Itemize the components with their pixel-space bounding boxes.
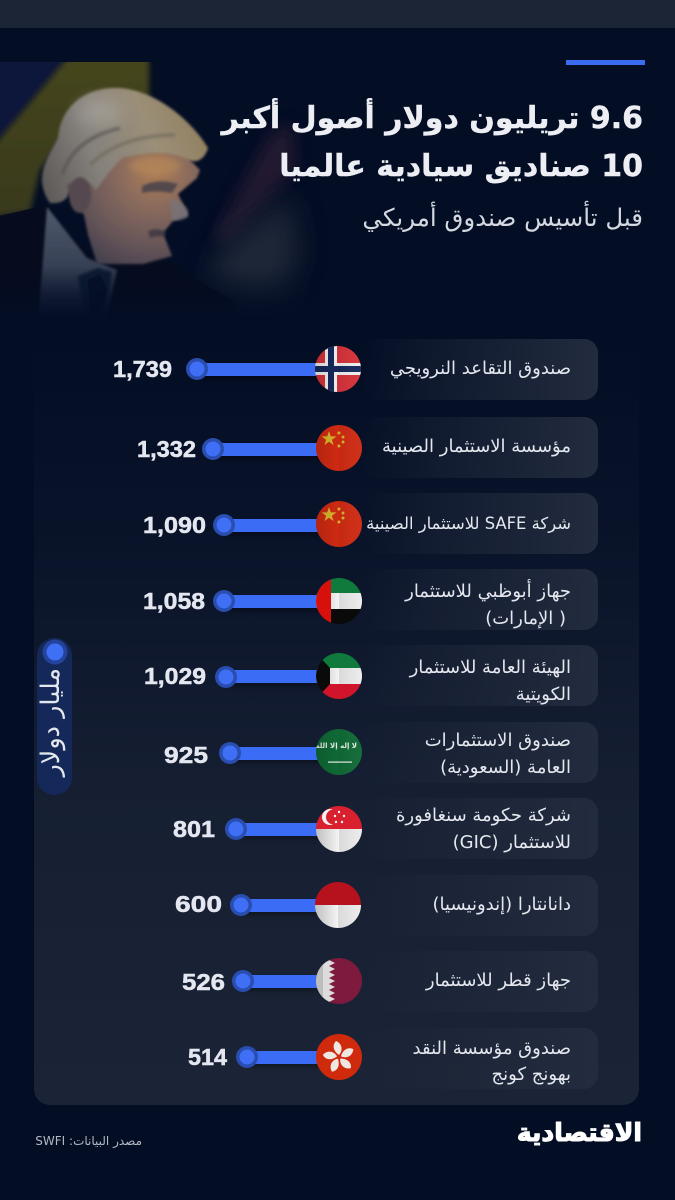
row 10: Hong Kong: 514 (188, 1044, 227, 1070)
source note: مصدر البيانات: SWFI (35, 1134, 142, 1149)
accent bar (566, 60, 645, 65)
row 7: Singapore (173, 798, 598, 859)
row 10: Hong Kong: بهونج كونج (492, 1064, 571, 1085)
row 2: China CIC (137, 417, 598, 478)
row 3: China SAFE: شركة SAFE للاستثمار الصينية (366, 514, 571, 534)
row 6: Saudi Arabia: لا إله إلا الله (315, 742, 357, 750)
row 9: Qatar: 526 (182, 969, 225, 995)
row 4: UAE: جهاز أبوظبي للاستثمار (404, 579, 571, 602)
row 5: Kuwait: الهيئة العامة للاستثمار (409, 657, 571, 678)
row 4: UAE (143, 569, 598, 630)
top bar (0, 0, 675, 28)
subtitle: قبل تأسيس صندوق أمريكي (362, 201, 643, 232)
row 7: Singapore: شركة حكومة سنغافورة (396, 805, 571, 826)
row 5: Kuwait: 1,029 (144, 663, 206, 689)
row 2: China CIC: 1,332 (137, 436, 196, 462)
row 9: Qatar: جهاز قطر للاستثمار (425, 970, 571, 991)
legend pill: unit (36, 638, 72, 795)
row 3: China SAFE: 1,090 (143, 512, 206, 538)
row 9: Qatar (182, 951, 598, 1012)
row 8: Indonesia (175, 875, 598, 936)
logo: Al Eqtisadiah: الاقتصادية (517, 1118, 642, 1147)
row 1: Norway (113, 339, 598, 400)
row 6: Saudi Arabia (164, 722, 598, 783)
row 1: Norway: صندوق التقاعد النرويجي (390, 358, 571, 379)
row 7: Singapore: للاستثمار (GIC) (453, 832, 571, 853)
row 6: Saudi Arabia: العامة (السعودية) (440, 757, 571, 778)
row 4: UAE: ( الإمارات) (485, 608, 566, 629)
row 1: Norway: 1,739 (113, 356, 172, 382)
row 10: Hong Kong (188, 1028, 598, 1089)
row 7: Singapore: 801 (173, 816, 215, 842)
row 5: Kuwait: الكويتية (516, 684, 571, 705)
row 8: Indonesia: 600 (175, 891, 222, 917)
row 5: Kuwait (144, 645, 598, 706)
row 10: Hong Kong: صندوق مؤسسة النقد (413, 1038, 571, 1059)
title: 9.6 تريليون دولار أصول أكبر (220, 98, 643, 136)
title: 10 صناديق سيادية عالميا (279, 149, 643, 184)
legend pill: unit: مليار دولار (36, 668, 66, 779)
panel: chart background (34, 340, 639, 1105)
row 6: Saudi Arabia: صندوق الاستثمارات (425, 730, 571, 751)
title (220, 98, 643, 184)
row 2: China CIC: مؤسسة الاستثمار الصينية (382, 436, 571, 457)
row 6: Saudi Arabia: 925 (164, 742, 208, 768)
row 4: UAE: 1,058 (143, 588, 205, 614)
photo: portrait of Donald Trump (0, 62, 305, 304)
row 8: Indonesia: دانانتارا (إندونيسيا) (433, 894, 571, 915)
row 3: China SAFE (143, 493, 598, 554)
